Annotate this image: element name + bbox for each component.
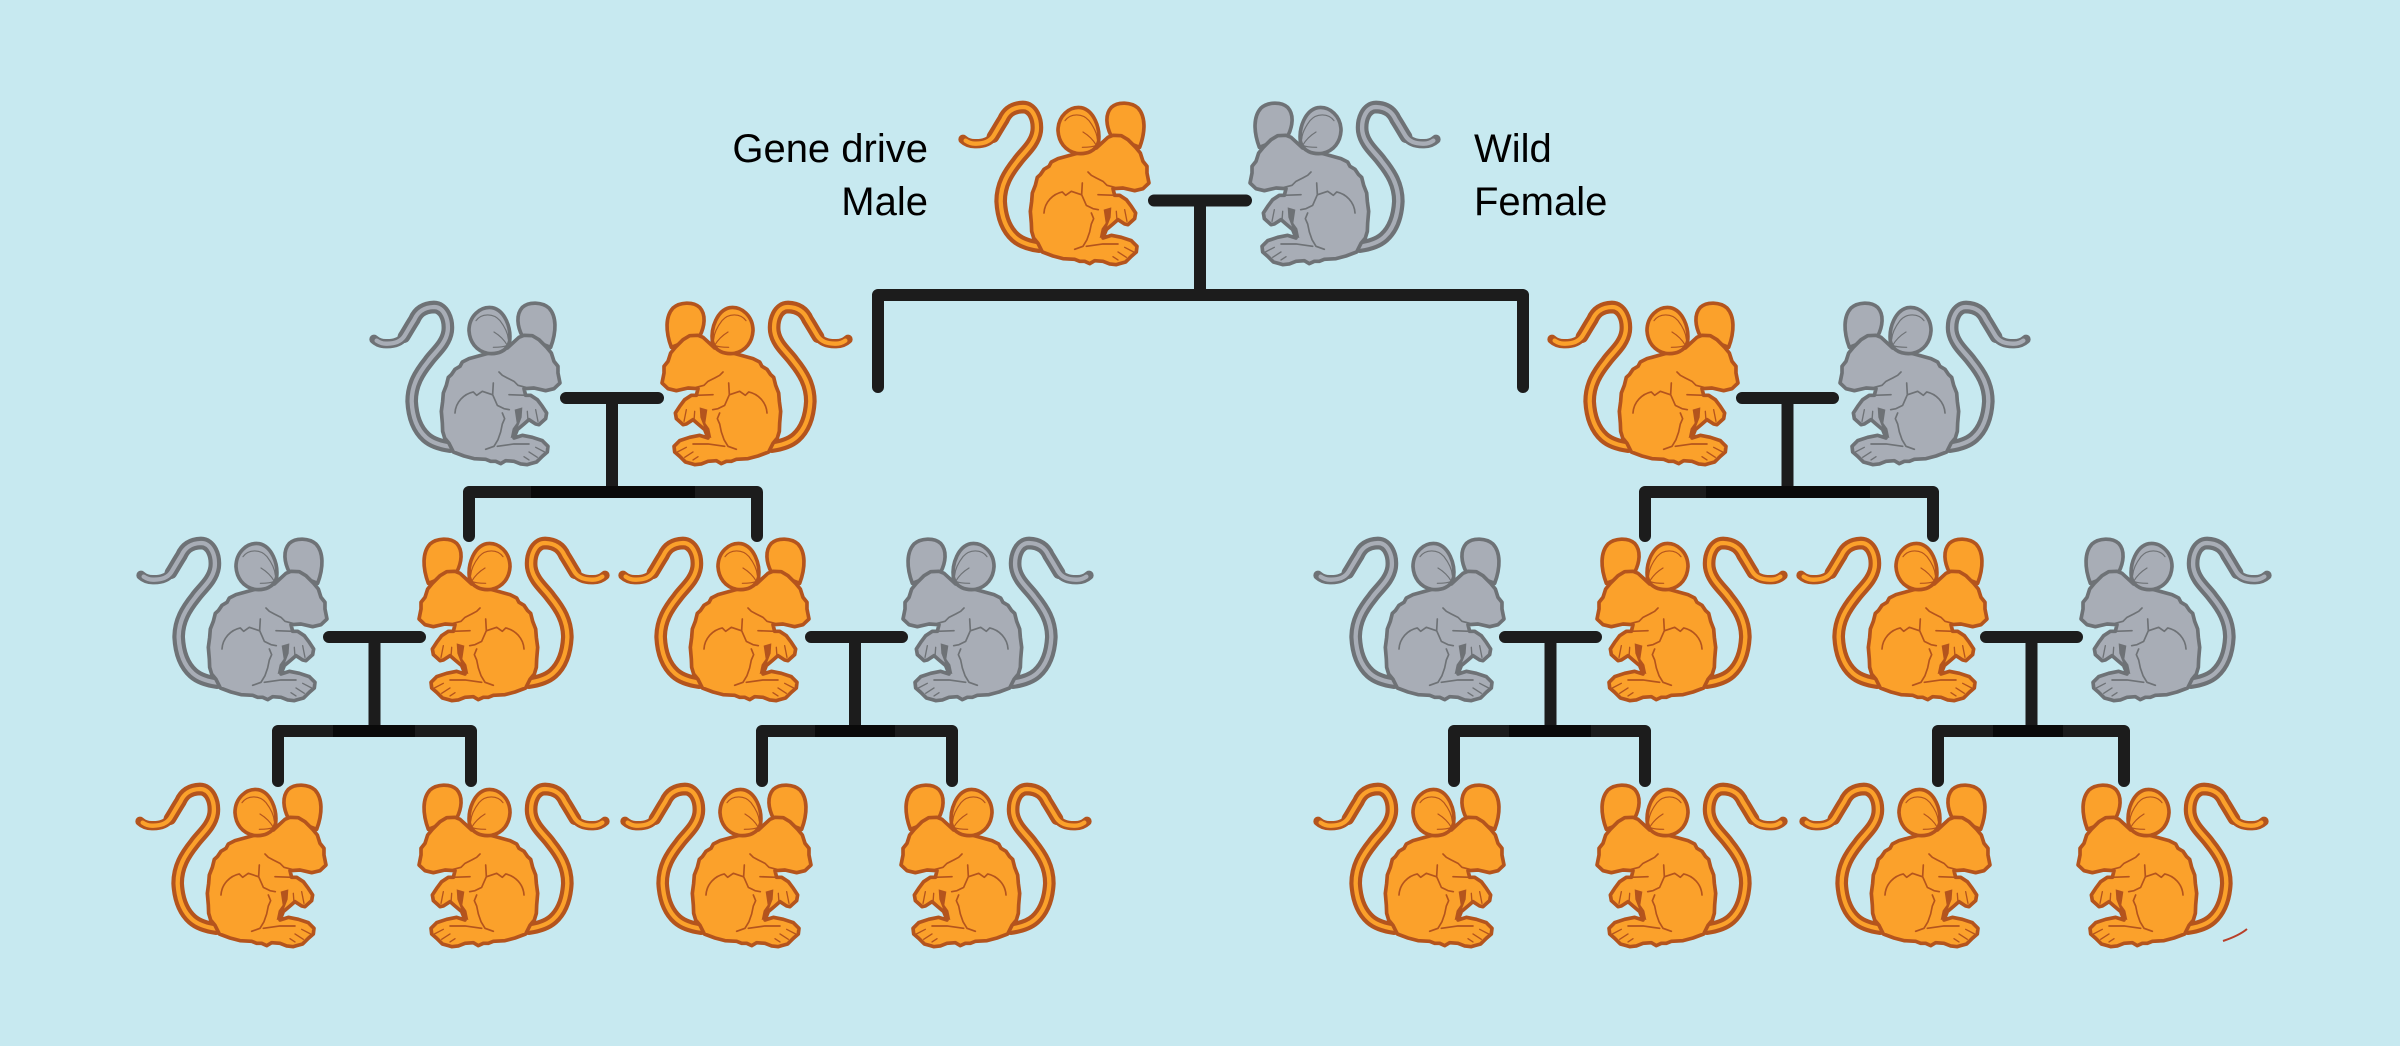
generation 3 group 2: gene drive mouse [625,785,811,947]
generation 2 group 2: gene drive mouse [623,539,809,701]
pedigree connector: top pair to generation 1 [878,200,1523,387]
generation 1 left: gene drive mouse [662,303,848,465]
generation 2 group 1: gene drive mouse [419,539,605,701]
generation 2 group 3: gene drive mouse [1597,539,1783,701]
pedigree connector: generation 1 left [469,398,757,536]
generation 2 group 2: wild mouse [903,539,1089,701]
generation 3 group 4: gene drive mouse [2078,785,2264,947]
generation 0: gene drive male mouse [963,103,1149,265]
generation 3 group 1: gene drive mouse [140,785,326,947]
label: gene drive male: Gene drive [732,127,928,171]
pedigree connector: group 4 [1938,637,2124,781]
stray red mark [2223,929,2247,941]
pedigree connector: group 2 [762,637,952,781]
generation 1 left: wild mouse [374,303,560,465]
generation 3 group 3: gene drive mouse [1318,785,1504,947]
label: gene drive male: Male [841,180,928,224]
pedigree connector: generation 1 right [1645,398,1933,536]
generation 2 group 3: wild mouse [1318,539,1504,701]
generation 3 group 3: gene drive mouse [1597,785,1783,947]
generation 2 group 4: wild mouse [2081,539,2267,701]
generation 1 right: gene drive mouse [1552,303,1738,465]
generation 3 group 2: gene drive mouse [901,785,1087,947]
generation 3 group 4: gene drive mouse [1804,785,1990,947]
label: wild female: Wild [1474,127,1552,171]
pedigree connector: group 1 [278,637,471,781]
generation 3 group 1: gene drive mouse [419,785,605,947]
generation 2 group 1: wild mouse [141,539,327,701]
generation 0: wild female mouse [1250,103,1436,265]
label: wild female: Female [1474,180,1607,224]
generation 1 right: wild mouse [1840,303,2026,465]
generation 2 group 4: gene drive mouse [1801,539,1987,701]
pedigree connector: group 3 [1454,637,1645,781]
